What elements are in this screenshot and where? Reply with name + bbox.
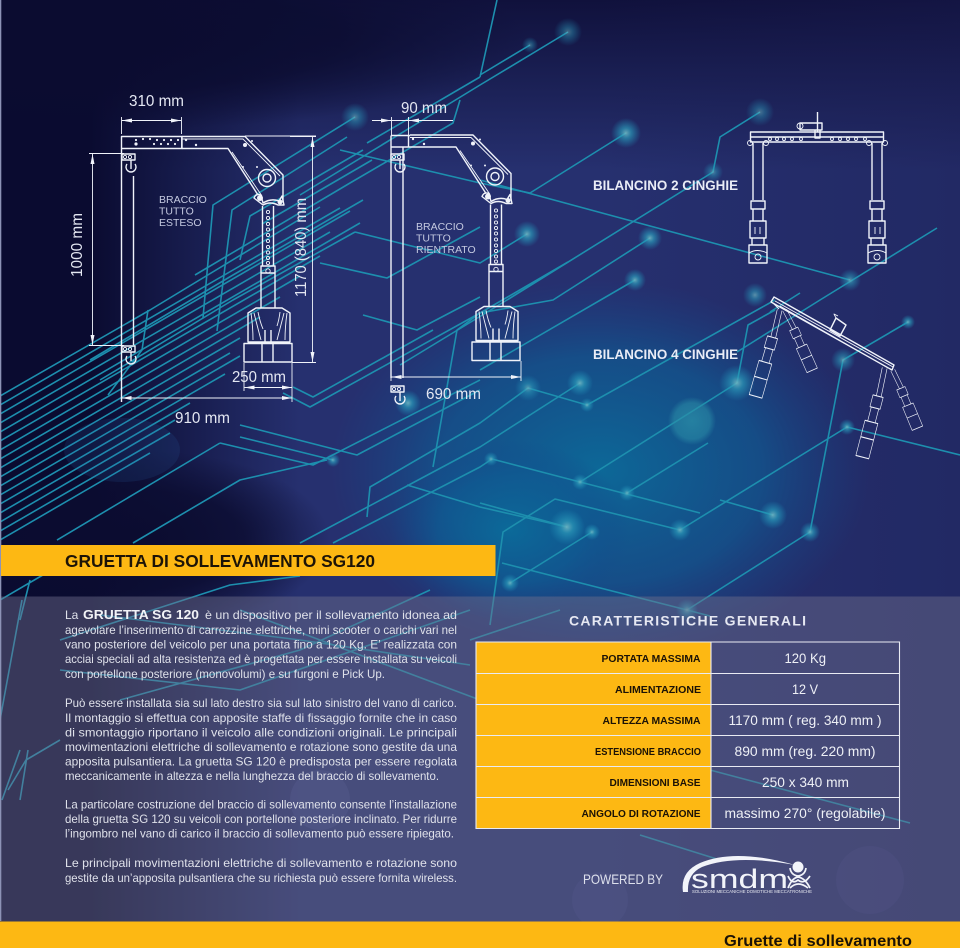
dimension: 910 mm (122, 396, 292, 427)
text block: intro paragraph: vano posteriore del veicolo per una portata fino a 120 Kg. E’ realizzata con (65, 638, 457, 652)
row: dimensioni base: DIMENSIONI BASE (610, 777, 700, 789)
label: bilancino 4 cinghie: BILANCINO 4 CINGHIE (593, 347, 738, 362)
title bar: gruetta di sollevamento SG120 (1, 545, 496, 576)
row: portata massima: PORTATA MASSIMA (602, 653, 701, 665)
text block: installation paragraph: Può essere installata sia sul lato destro sia sul lato sinistro del vano di carico. (65, 696, 457, 710)
text block: installation paragraph: meccanicamente in altezza e nella lunghezza del braccio di sollevamento. (65, 769, 439, 783)
text block: intro paragraph (65, 607, 457, 681)
dimension: 1000 mm: 1000 mm (69, 213, 86, 277)
row: alimentazione (615, 682, 818, 697)
background: glowing nodes (64, 18, 915, 621)
dimension: 90 mm (372, 100, 453, 135)
text block: installation paragraph: movimentazioni elettriche di sollevamento e rotazione sono gestite da una (65, 740, 457, 754)
dimension: 250 mm (232, 363, 292, 402)
text block: intro paragraph: GRUETTA SG 120 (83, 607, 199, 622)
row: angolo di rotazione: ANGOLO DI ROTAZIONE (582, 808, 700, 820)
dimension: 250 mm: 250 mm (232, 369, 286, 386)
text block: intro paragraph: agevolare l’inserimento di carrozzine elettriche, mini scooter o carichi vari nel (65, 623, 457, 637)
logo: smdm: smdm (691, 864, 788, 894)
text block: wireless control paragraph (65, 856, 457, 885)
text block: arm construction paragraph: della gruetta SG 120 su veicoli con portellone posteriore inclinato. Per ridurre (65, 812, 457, 826)
row: alimentazione: ALIMENTAZIONE (615, 684, 701, 696)
drawing: crane with arm fully extended (122, 136, 316, 402)
label: braccio tutto esteso: BRACCIO (159, 194, 207, 206)
row: altezza massima: 1170 mm ( reg. 340 mm ) (728, 713, 882, 728)
logo: smdm (683, 856, 812, 894)
text block: arm construction paragraph (65, 798, 457, 840)
row: alimentazione: 12 V (792, 682, 818, 697)
text block: wireless control paragraph: Le principali movimentazioni elettriche di sollevamento e rotazione sono (65, 856, 457, 870)
dimension: 310 mm: 310 mm (129, 93, 184, 110)
left edge stripe (0, 0, 1, 921)
drawing: crane with arm fully retracted (391, 135, 520, 404)
background: circuit lines, left bundle (0, 77, 480, 540)
row: dimensioni base (610, 775, 849, 790)
text block: installation paragraph (65, 696, 457, 783)
dimension: 690 mm: 690 mm (426, 386, 481, 403)
text block: intro paragraph: acciai speciali ad alta resistenza ed è progettata per essere installata su veicoli (65, 652, 457, 666)
drawing: two-strap spreader bar (748, 112, 888, 263)
title bar: gruetta di sollevamento SG120: GRUETTA DI SOLLEVAMENTO SG120 (65, 551, 375, 571)
row: estensione braccio: ESTENSIONE BRACCIO (595, 746, 701, 758)
row: angolo di rotazione: massimo 270° (regolabile) (724, 806, 886, 821)
label: braccio tutto rientrato (416, 221, 476, 256)
row: portata massima (602, 651, 826, 666)
logo: smdm: SOLUZIONI MECCANICHE DOMOTICHE MECCATRONICHE (692, 889, 812, 894)
dimension: 910 mm: 910 mm (175, 410, 230, 427)
label: braccio tutto esteso: ESTESO (159, 217, 202, 229)
dimension: 1170 (840) mm (290, 136, 316, 362)
text block: wireless control paragraph: gestite da un’apposita pulsantiera che su richiesta può essere fornita wireless. (65, 871, 457, 885)
lower text panel background (0, 596, 960, 928)
text block: arm construction paragraph: l’ingombro nel vano di carico il braccio di sollevamento può essere ripiegato. (65, 826, 454, 840)
dimension: 310 mm (122, 93, 184, 134)
row: altezza massima: ALTEZZA MASSIMA (602, 715, 701, 727)
label: bilancino 2 cinghie: BILANCINO 2 CINGHIE (593, 178, 738, 193)
dimension: 690 mm (391, 361, 521, 403)
text block: installation paragraph: Il montaggio si effettua con apposite staffe di fissaggio fornite che in caso (65, 711, 457, 725)
label: braccio tutto rientrato: RIENTRATO (416, 244, 476, 256)
drawing: four-strap spreader bar (749, 297, 923, 459)
row: angolo di rotazione (582, 806, 886, 821)
row: portata massima: 120 Kg (784, 651, 826, 666)
text block: intro paragraph: è un dispositivo per il sollevamento idonea ad (205, 608, 457, 622)
dimension: 1170 (840) mm: 1170 (840) mm (293, 198, 310, 297)
row: dimensioni base: 250 x 340 mm (762, 775, 849, 790)
text block: arm construction paragraph: La particolare costruzione del braccio di sollevamento consente l’installazione (65, 798, 457, 812)
text block: intro paragraph: con portellone posteriore (monovolumi) e su furgoni e Pick Up. (65, 667, 385, 681)
label: braccio tutto esteso: TUTTO (159, 206, 194, 218)
label: braccio tutto rientrato: BRACCIO (416, 221, 464, 233)
row: estensione braccio: 890 mm (reg. 220 mm) (734, 744, 876, 759)
row: altezza massima (602, 713, 882, 728)
heading: caratteristiche generali: CARATTERISTICHE GENERALI (569, 612, 806, 628)
table: general characteristics (476, 642, 900, 828)
text block: installation paragraph: di smontaggio riportano il veicolo alle condizioni originali. Le principali (65, 726, 457, 740)
label: braccio tutto rientrato: TUTTO (416, 232, 451, 244)
row: estensione braccio (595, 744, 876, 759)
powered by label: POWERED BY (583, 871, 664, 887)
dimension: 90 mm: 90 mm (401, 100, 447, 117)
text block: installation paragraph: apposita pulsantiera. La gruetta SG 120 è predisposta per essere regolata (65, 754, 457, 768)
footer bar (0, 922, 960, 948)
dimension: 1000 mm (69, 154, 124, 346)
label: braccio tutto esteso (159, 194, 207, 229)
text block: intro paragraph: La (65, 608, 79, 622)
